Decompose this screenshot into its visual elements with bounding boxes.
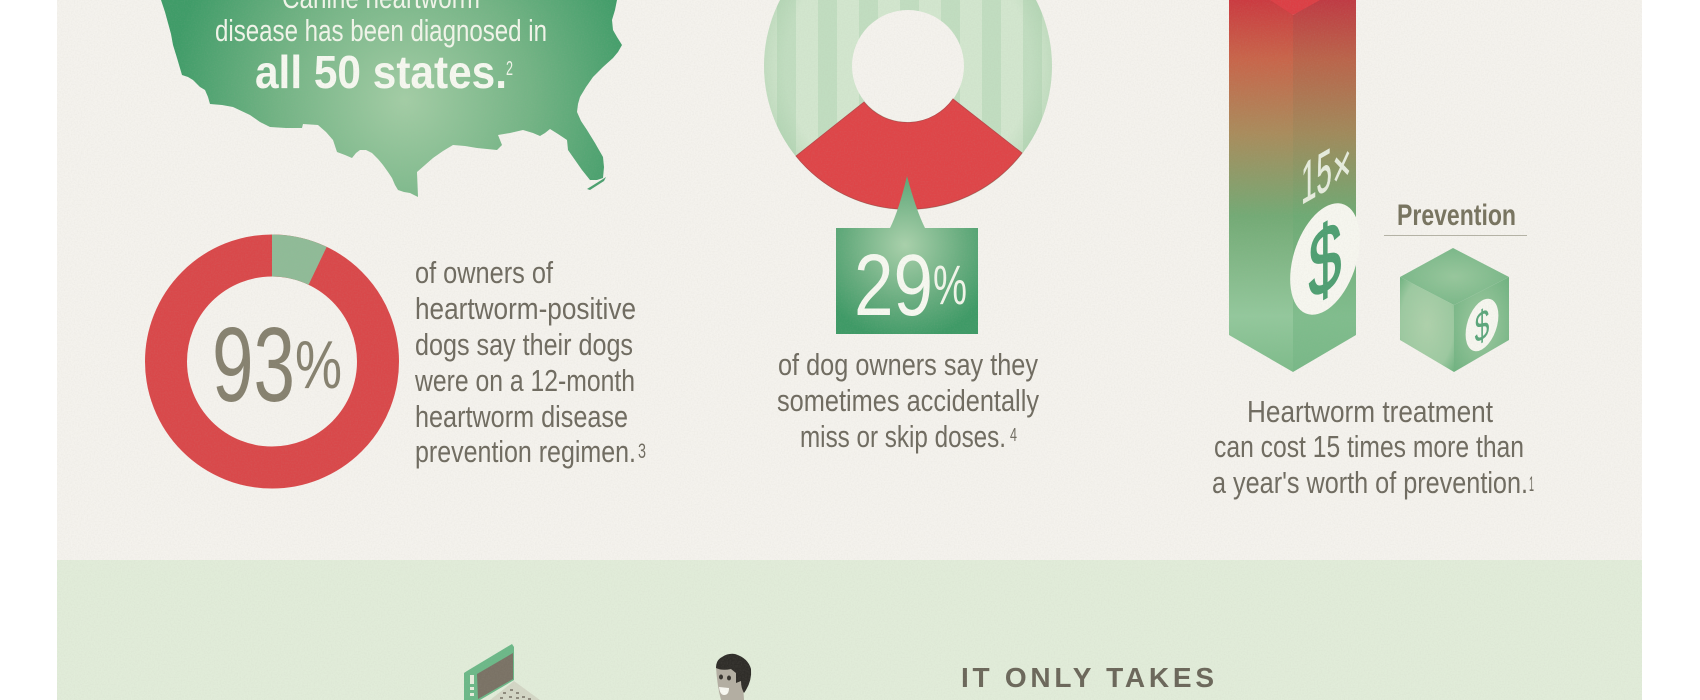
footnote 2: 2 [506,58,513,80]
ring percent sign: % [295,327,342,403]
panel: 50 states map [161,0,622,197]
missed doses description [777,347,1039,454]
panel: treatment versus prevention cost [1212,0,1534,500]
callout value 29: 29 [854,237,933,334]
cube left face [1400,277,1454,372]
bar top face [1270,0,1320,15]
owners description: heartworm-positive [415,291,636,326]
icon: large dollar coin [1290,187,1360,332]
tall treatment bar [1229,0,1356,372]
owners description: were on a 12-month [414,363,635,398]
man eyes [719,674,731,680]
prevention heading: Prevention [1397,199,1516,232]
panel: 29 percent donut [764,0,1052,454]
ring value 93: 93 [212,306,295,424]
red ring [166,256,378,468]
callout percent sign: % [933,253,967,316]
man smile [719,687,729,695]
missed doses description: 4 [1010,425,1017,445]
prevention cube [1400,248,1509,372]
laptop keys [500,689,531,700]
icon: small dollar coin: $ [1475,298,1489,353]
cost description: a year's worth of prevention. [1212,465,1528,500]
missed doses description: miss or skip doses. [800,419,1006,454]
bar right face [1293,0,1356,372]
owners description: 3 [638,440,646,463]
owners description: of owners of [415,255,553,290]
infographic canvas: 1 [1529,473,1534,496]
icon: large dollar coin: $ [1309,198,1341,322]
owners description [414,255,646,469]
cost description: Heartworm treatment [1247,394,1493,429]
map text: all 50 states: all 50 states. [255,46,507,98]
panel: 93 percent ring [166,234,646,469]
paper background [57,0,1642,560]
15 times label: 15 [1301,135,1332,217]
map of the United States [161,0,622,197]
laptop vents [470,675,474,696]
cost description [1212,394,1534,500]
owners description: dogs say their dogs [415,327,633,362]
laptop base with keyboard [490,681,540,700]
man hair [716,654,751,693]
laptop frame [464,644,514,700]
bottom green band [57,560,1642,700]
bar left face [1229,0,1293,372]
cube right face [1454,277,1509,372]
owners description: prevention regimen. [415,434,636,469]
cost description: can cost 15 times more than [1214,429,1524,464]
striped donut [764,0,1052,210]
15 times label: × [1332,131,1351,200]
donut edge shading [764,0,1052,210]
red wedge [796,99,1022,209]
missed doses description: of dog owners say they [778,347,1038,382]
owners description: heartworm disease [415,399,628,434]
cube top face [1400,248,1509,305]
laptop screen [477,653,513,699]
icon: laptop [464,644,540,700]
heading: it only takes: IT ONLY TAKES [961,662,1214,693]
man face and neck [716,667,744,700]
green callout box [836,176,978,334]
icon: small dollar coin [1466,291,1498,359]
florida keys [587,177,606,190]
missed doses description: sometimes accidentally [777,383,1039,418]
map text: diagnosed line: disease has been diagnosed in [215,13,547,48]
icon: smiling man [716,654,751,700]
green slice [272,234,327,285]
